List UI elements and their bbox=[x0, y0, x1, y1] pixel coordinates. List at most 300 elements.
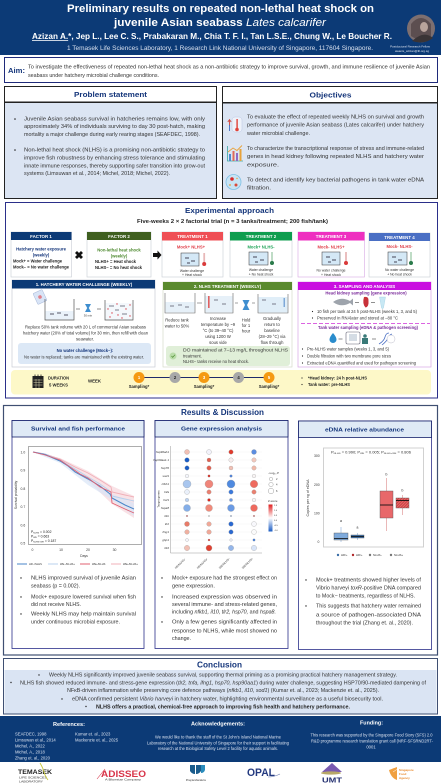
p values: NLHS bbox=[334, 453, 341, 455]
axis tick labels: 0.8 bbox=[20, 487, 25, 491]
axis tick labels: 20 bbox=[86, 548, 90, 552]
gene expression takeaways: Increased expression was observed in bbox=[172, 595, 277, 601]
p values bbox=[31, 530, 56, 544]
treatment 1 card: Water challenge bbox=[180, 269, 204, 273]
size and colour legend: -1.0 bbox=[274, 530, 279, 532]
title: juvenile Asian seabass Lates calcarifer bbox=[113, 17, 326, 29]
gene labels: il1b bbox=[164, 514, 169, 518]
step 2 description columns bbox=[165, 316, 286, 345]
treatment 1 card: TREATMENT 1 bbox=[177, 234, 208, 239]
step 2: NLHS treatment bbox=[163, 282, 292, 367]
factor 2 card bbox=[87, 232, 151, 277]
box: Mock- NLHS-: a bbox=[340, 519, 342, 523]
acknowledgements: Laboratory of the National University of Singapore for their support in facilitating bbox=[147, 740, 290, 746]
survival takeaways bbox=[20, 576, 136, 626]
logo: Adisseo bbox=[97, 769, 146, 782]
header banner bbox=[0, 0, 441, 55]
week timeline nodes: 5 bbox=[268, 375, 271, 380]
p values: = 0.005; P bbox=[364, 450, 385, 454]
heading: problem statement: Problem statement bbox=[74, 90, 147, 99]
step 3: sampling and analysis: 3. SAMPLING AND ANALYSIS bbox=[334, 284, 395, 289]
week timeline nodes: 3 bbox=[203, 375, 206, 380]
duration label: 5 WEEKS bbox=[49, 382, 68, 388]
conclusion points: NLHS fish showed reduced immune- and stress-gene expression ( tlr2, tnfa, ifng1, hsp70, hsp90aa1 ) during water challenge, suggesting HSP70/90-mediated dampening of bbox=[20, 680, 427, 686]
funding: Funding: bbox=[360, 720, 383, 726]
callout: dissolved oxygen: DO maintained at 7–13 mg/L throughout NLHS bbox=[183, 348, 288, 352]
gene labels: il10 bbox=[164, 546, 169, 550]
tank water bullets: Double filtration with two membrane pore sizes bbox=[307, 354, 391, 358]
survival legend bbox=[17, 562, 138, 566]
heading: survival: Survival and fish performance bbox=[31, 427, 126, 433]
treatment 4 card bbox=[369, 233, 430, 277]
icon: hourglass hold bbox=[235, 300, 255, 310]
logo: Adisseo: ADISSEO bbox=[101, 769, 146, 779]
step 2: NLHS treatment: 2. NLHS TREATMENT (WEEKLY) bbox=[194, 284, 262, 289]
panel: conclusion bbox=[4, 658, 438, 714]
y axis labels: 200 bbox=[314, 483, 320, 487]
problem statement text: approximately 34% of individuals surviving to day 30 post-hatch, making bbox=[24, 124, 205, 130]
panel: eDNA relative abundance bbox=[298, 421, 432, 650]
problem statement text: Juvenile Asian seabass survival in hatcheries remains low, with only bbox=[24, 117, 205, 123]
head kidney sampling heading: Head kidney sampling (gene expression) bbox=[325, 290, 407, 296]
sample labels: WE/NLHS+ bbox=[241, 556, 254, 570]
eDNA takeaways: to Mock− treatments, regardless of NLHS. bbox=[316, 594, 415, 600]
acknowledgements: We would like to thank the staff of the St John's Island National Marine bbox=[155, 734, 282, 740]
icon: hourglass bbox=[84, 304, 93, 318]
step 1: hatchery water challenge: 1. HATCHERY WATER CHALLENGE (WEEKLY) bbox=[36, 282, 133, 287]
size and colour legend: 6 bbox=[276, 489, 278, 493]
gene labels: hsp90ab1 bbox=[156, 450, 169, 454]
box plot legend: NLHS− bbox=[373, 553, 382, 557]
icon: arrow to treatments bbox=[153, 250, 162, 260]
survival takeaways: seabass (p = 0.002). bbox=[31, 584, 80, 590]
treatment 2 card: TREATMENT 2 bbox=[246, 234, 277, 239]
step 2 description columns: flow through bbox=[261, 340, 284, 345]
survival chart bbox=[14, 446, 142, 558]
week timeline nodes: 2 bbox=[174, 375, 177, 380]
axis tick labels: 0.9 bbox=[20, 468, 25, 472]
heading: experimental approach: Experimental approach bbox=[185, 206, 274, 215]
eDNA takeaways: throughout the trial (Zhang et. al., 2020). bbox=[316, 621, 413, 627]
curve: Mock- NLHS- bbox=[33, 452, 134, 509]
objective text 2: genes in head kidney following repeated NLHS and hatchery water bbox=[247, 154, 424, 160]
size and colour legend: 0.0 bbox=[274, 520, 278, 522]
step 2 description columns: sous vide bbox=[209, 340, 228, 345]
presenter contact bbox=[390, 45, 431, 53]
week label: WEEK bbox=[88, 378, 101, 384]
step 2 description columns: °C (to 39–40 °C) bbox=[203, 328, 234, 333]
gene labels: ifng1 bbox=[162, 530, 169, 534]
axis tick labels: 0.6 bbox=[20, 524, 25, 528]
eDNA takeaways bbox=[305, 578, 422, 627]
gene labels: sod1 bbox=[162, 474, 169, 478]
gene labels bbox=[153, 450, 169, 550]
affiliation: 1 Temasek Life Sciences Laboratory, 1 Research Link National University of Singapore, 117604 Singapore. bbox=[67, 46, 373, 52]
panel: survival and fish performance bbox=[12, 420, 144, 648]
tank water bullets: Extracted eDNA quantified and used for pathogen screening bbox=[307, 360, 417, 366]
p values: = 0.002 bbox=[39, 530, 52, 534]
panel: gene expression analysis bbox=[153, 420, 288, 648]
treatment 1 card: Mock+ NLHS+ bbox=[177, 244, 206, 250]
objective text 3: To detect and identify key bacterial pathogens in tank water eDNA bbox=[247, 178, 425, 184]
conclusion points: NFκB-driven inflammation while preserving core defence pathways ( nfkb1, il10, sod1) (Kumar et. al., 2023; Mackenzie et. al., 2025). bbox=[67, 688, 379, 694]
logo: Singapore Food Agency: Food bbox=[399, 772, 406, 776]
p values: P bbox=[31, 530, 33, 534]
problem statement text bbox=[14, 117, 206, 177]
logo: Singapore Food Agency: Singapore bbox=[399, 768, 414, 772]
icon: multiply sign: ✖ bbox=[74, 250, 84, 262]
box plot legend: NLHS+ bbox=[394, 553, 403, 557]
arrow bbox=[97, 308, 101, 310]
axis tick labels: 1.0 bbox=[20, 450, 25, 454]
axis tick labels bbox=[14, 450, 116, 558]
sample labels bbox=[174, 556, 254, 570]
objective text 2 bbox=[247, 146, 424, 169]
treatment 3 card bbox=[298, 232, 364, 277]
author photo bbox=[407, 14, 435, 42]
panel: objectives bbox=[222, 86, 438, 198]
icon: water, filter, operator and DNA bbox=[330, 332, 395, 345]
week timeline nodes: Sampling* bbox=[194, 384, 215, 389]
factor 1 card: FACTOR 1 bbox=[30, 234, 52, 239]
size and colour legend: Z-score bbox=[268, 499, 278, 503]
arrow bbox=[76, 308, 80, 310]
survival legend: WE+/NLHS+ bbox=[123, 562, 138, 566]
gene labels: hspa8 bbox=[161, 506, 169, 510]
funding: 0001 bbox=[366, 744, 376, 750]
logo: Temasek: LABORATORY bbox=[19, 780, 43, 784]
survival takeaways: Mock+ exposure lowered survival when fish bbox=[31, 595, 136, 601]
treatment 4 card: Mock- NLHS- bbox=[386, 244, 413, 249]
treatment 1 card: + Heat shock bbox=[182, 273, 202, 277]
factor 2 card: FACTOR 2 bbox=[108, 234, 130, 239]
icon: petri dish with bacteria bbox=[226, 174, 241, 190]
icon: heated tank bbox=[197, 293, 233, 313]
icon: recovery tank bbox=[258, 294, 288, 313]
curve: Mock+ NLHS+ bbox=[33, 452, 134, 501]
survival takeaways: under continuous microbial exposure. bbox=[31, 620, 120, 626]
sampling notes: *Head kidney: 24 h post-NLHS bbox=[308, 376, 367, 380]
eDNA takeaways: a source of pathogen-associated DNA bbox=[316, 613, 422, 619]
dots bbox=[183, 450, 258, 551]
acknowledgements: research at the Biological Safety Level 2 facility for aquatic animals. bbox=[158, 746, 278, 751]
week timeline nodes: Sampling* bbox=[259, 384, 280, 389]
p values: WE bbox=[33, 537, 37, 539]
box plot legend: HR/+ bbox=[356, 553, 363, 557]
eDNA takeaways: This suggests that hatchery water remained bbox=[316, 604, 421, 610]
timeline bar bbox=[11, 370, 431, 394]
y axis labels: 0 bbox=[318, 540, 320, 544]
week timeline nodes: 4 bbox=[237, 375, 240, 380]
sample labels: HR/NLHS− bbox=[174, 557, 187, 570]
sample labels: HR/NLHS+ bbox=[196, 557, 209, 570]
step 1: hatchery water challenge bbox=[12, 280, 155, 367]
survival legend: WE−/NLHS+ bbox=[60, 562, 75, 566]
gene labels: hsp90aa1.1 bbox=[153, 458, 169, 462]
step 2 description columns: for 1 bbox=[242, 323, 251, 328]
icon: reduced water tank bbox=[165, 293, 195, 313]
size and colour legend: −Log₁₀ P bbox=[268, 471, 279, 475]
objective text 3: filtration. bbox=[247, 186, 271, 192]
head kidney bullets bbox=[312, 309, 418, 320]
icon: pitcher pouring water bbox=[33, 289, 47, 305]
y axis labels: 300 bbox=[314, 454, 320, 458]
size and colour legend: 1.0 bbox=[274, 510, 278, 512]
tank water sampling heading: Tank water sampling (eDNA & pathogen screening) bbox=[318, 325, 419, 330]
step 1 description: seawater. bbox=[76, 336, 94, 342]
presenter contact: Postdoctoral Research Fellow bbox=[390, 45, 431, 49]
survival takeaways: NLHS improved survival of juvenile Asian bbox=[31, 576, 136, 582]
references: Kumar et. al., 2023 bbox=[75, 732, 111, 736]
callout: dissolved oxygen: treatment. bbox=[183, 354, 202, 358]
factor 2 card: Non-lethal heat shock bbox=[97, 248, 141, 252]
p values: = 0.990; P bbox=[341, 450, 361, 454]
treatment 3 card: + Heat shock bbox=[321, 273, 341, 277]
gene labels: hsf1 bbox=[163, 498, 169, 502]
treatment 3 card: TREATMENT 3 bbox=[316, 234, 347, 239]
y axis labels bbox=[306, 454, 320, 544]
gene labels: hsp70 bbox=[161, 466, 169, 470]
treatment 4 card: TREATMENT 4 bbox=[384, 235, 415, 240]
p values: P bbox=[331, 450, 333, 454]
axis tick labels: 0 bbox=[32, 548, 34, 552]
p values: NLHS×WE bbox=[33, 540, 44, 544]
factor 1 card: Mock+ = Water challenge bbox=[13, 258, 63, 264]
logo: Adisseo: A Bluestar Company bbox=[105, 778, 142, 782]
icon: calendar bbox=[32, 374, 44, 388]
box plot legend: HR/+ bbox=[341, 553, 348, 557]
logo: Temasek: LIFE SCIENCES bbox=[19, 776, 47, 780]
treatment 2 card: + No heat shock bbox=[249, 272, 274, 276]
curve: Mock+ NLHS- bbox=[33, 452, 134, 513]
acknowledgements bbox=[147, 722, 290, 751]
title: Preliminary results on repeated non-lethal heat shock on bbox=[67, 3, 374, 15]
gene expression takeaways: several immune- and stress-related genes, bbox=[172, 602, 277, 608]
problem statement text: improve fish robustness by enhancing stress tolerance and stimulating bbox=[24, 156, 205, 162]
survival legend: WE+/NLHS bbox=[92, 562, 106, 566]
references: References: bbox=[53, 722, 85, 728]
step 2 description columns: hour bbox=[242, 328, 251, 334]
p values: P bbox=[31, 539, 33, 543]
treatment 2 card bbox=[230, 232, 292, 277]
objective text 1: performance of juvenile Asian seabass (Lates calcarifer) under hatchery bbox=[247, 123, 424, 129]
factor 1 card: (weekly) bbox=[33, 252, 50, 258]
heading: conclusion: Conclusion bbox=[197, 660, 242, 670]
axis tick labels: 30 bbox=[113, 548, 116, 552]
step 2 description columns: return to bbox=[264, 322, 280, 327]
gene expression takeaways: Mock+ exposure had the strongest effect on bbox=[172, 576, 277, 582]
curve: Mock- NLHS+ bbox=[33, 452, 134, 497]
aim box bbox=[4, 58, 438, 82]
objective text 2: exposure. bbox=[247, 163, 279, 169]
funding bbox=[310, 720, 434, 750]
tank water bullets: Pre-NLHS water samples (weeks 1, 3, and 5) bbox=[307, 346, 390, 352]
conclusion points bbox=[10, 673, 427, 710]
gene expression takeaways: change. bbox=[172, 636, 191, 642]
gene expression takeaways: response to NLHS, while most showed no bbox=[172, 629, 277, 635]
logo: Singapore Food Agency: Agency bbox=[399, 776, 410, 780]
gene expression takeaways bbox=[161, 576, 277, 642]
p values: = 0.187 bbox=[44, 539, 56, 543]
p values: WE bbox=[360, 453, 365, 455]
axis tick labels: Survival probability bbox=[14, 480, 18, 509]
aim box: Aim: bbox=[8, 68, 25, 75]
sample labels: WE/NLHS− bbox=[218, 556, 231, 570]
step 1 description: Replace 50% tank volume with 20 L of commercial Asian seabass bbox=[25, 324, 146, 330]
factor 1 card: Mock− = No water challenge bbox=[13, 264, 70, 270]
icon: rising bar chart bbox=[228, 146, 243, 161]
axis tick labels: 10 bbox=[59, 548, 63, 552]
treatment 2 card: Water challenge bbox=[249, 268, 273, 272]
sampling notes: Tank water: pre-NLHS bbox=[308, 382, 350, 387]
box: Mock+ NLHS+: b bbox=[402, 488, 404, 492]
survival takeaways: did not receive NLHS. bbox=[31, 602, 81, 608]
gene labels: Target genes bbox=[156, 490, 160, 508]
objective text 2: To characterize the transcriptional response of stress and immune-related bbox=[247, 146, 424, 152]
logo: OPAL: OPAL bbox=[247, 767, 275, 779]
footer band bbox=[0, 716, 441, 762]
gene expression takeaways: including nfkb1, il10, tlr2, hsp70, and hspa8. bbox=[172, 610, 276, 616]
size and colour legend bbox=[268, 471, 279, 532]
gene labels: nfkb1 bbox=[162, 482, 169, 486]
logos row bbox=[18, 763, 414, 784]
size and colour legend: 0.5 bbox=[274, 515, 278, 517]
callout: no water challenge bbox=[18, 343, 151, 364]
objective text 3 bbox=[247, 178, 425, 192]
authors: Azizan A.*, Jep L., Lee C. S., Prabakaran M., Chia T. F. I., Tan L.S.E., Chung W., Le Boucher R. bbox=[32, 32, 392, 41]
references: SEAFDEC, 1998 bbox=[15, 732, 47, 736]
box: Mock+ NLHS-: b bbox=[386, 472, 388, 476]
gene labels: tnfa bbox=[164, 490, 169, 494]
subtitle: trial design: Five-weeks 2 × 2 factorial trial (n = 3 tanks/treatment; 200 fish/tank) bbox=[137, 219, 328, 225]
gene labels: tlr2 bbox=[165, 522, 169, 526]
funding: R&D programme research translation grant call (NRF-SFSRND2RT- bbox=[311, 738, 434, 744]
icon: hourglass: 30 min bbox=[84, 314, 93, 318]
eDNA takeaways: Mock+ treatments showed higher levels of bbox=[316, 578, 422, 584]
objective text 1 bbox=[247, 115, 424, 137]
step 3: sampling and analysis bbox=[298, 282, 431, 367]
gene expression takeaways: Only a few genes significantly affected in bbox=[172, 620, 277, 626]
step 2 description columns: Gradually bbox=[263, 316, 282, 321]
axis tick labels: 0.7 bbox=[20, 505, 25, 509]
panel: problem statement bbox=[4, 86, 216, 198]
p values: NLHS×WE bbox=[384, 452, 397, 455]
logo: UMT bbox=[321, 763, 343, 784]
eDNA takeaways: Vibrio harveyi toxR-positive DNA compared bbox=[316, 586, 421, 592]
gene labels: gbp1 bbox=[162, 538, 169, 542]
references: Michel, A., 2022 bbox=[15, 744, 45, 748]
aim box: seabass under hatchery microbial challenge conditions. bbox=[28, 73, 159, 79]
axis tick labels: Days bbox=[80, 554, 88, 558]
heading: results and discussion: Results & Discussion bbox=[181, 408, 264, 417]
head kidney bullets: 10 fish per tank at 24 h post-NLHS (weeks 1, 3, and 5) bbox=[317, 309, 418, 314]
logo: Temasek: TEMASEK bbox=[18, 769, 52, 776]
logo: shield: Peptobiotics bbox=[186, 778, 207, 782]
factor 2 card: (weekly) bbox=[111, 254, 128, 258]
references: Zhang et. al., 2020 bbox=[15, 756, 51, 760]
objective text 1: water microbial challenge. bbox=[247, 131, 310, 137]
y axis labels: Copies per ng of eDNA bbox=[306, 479, 310, 516]
box plot bbox=[306, 448, 424, 547]
problem statement text: systems (Limsuwan et al., 2014; Michel, 2018; Michel, 2022). bbox=[24, 171, 170, 177]
factor 1 card: Hatchery water exposure bbox=[16, 246, 67, 252]
acknowledgements: Acknowledgements: bbox=[191, 722, 245, 728]
step 2 description columns: using 1200 W bbox=[205, 334, 231, 339]
heading: objectives: Objectives bbox=[310, 90, 352, 99]
logo: shield bbox=[186, 765, 207, 782]
treatment 4 card: + No heat shock bbox=[387, 272, 412, 276]
step 2 description columns: (28–29 °C) via bbox=[259, 334, 286, 339]
survival legend: HR−/NLHS bbox=[29, 562, 42, 566]
treatment 3 card: Mock- NLHS+ bbox=[317, 244, 345, 250]
treatment 4 card: No water challenge bbox=[385, 268, 414, 272]
size and colour legend: 2 bbox=[276, 477, 278, 481]
references: Limsuwan et al., 2014 bbox=[15, 738, 56, 742]
head kidney bullets: Preserved in RNAlater and stored at −80 °C bbox=[317, 316, 398, 320]
survival takeaways: Weekly NLHS may help maintain survival bbox=[31, 612, 136, 618]
dot plot bbox=[153, 446, 279, 570]
problem statement text: Non-lethal heat shock (NLHS) is a promising non-antibiotic strategy to bbox=[24, 148, 205, 154]
factor 1 card bbox=[11, 232, 72, 277]
step 1 description: hatchery water (20% of total volume) for 30 min, then refill with clean bbox=[23, 330, 149, 336]
size and colour legend: -0.5 bbox=[274, 525, 279, 527]
conclusion points: eDNA confirmed persistent Vibrio harveyi in hatchery water, highlighting environmental surveillance as a useful biosecurity tool. bbox=[72, 697, 383, 703]
icon: clean water tank bbox=[45, 299, 74, 320]
logo: Singapore Food Agency bbox=[389, 767, 414, 780]
box plot legend bbox=[337, 553, 403, 557]
step 2 description columns: baseline bbox=[264, 328, 280, 333]
axis tick labels: 0.5 bbox=[20, 542, 25, 546]
duration label bbox=[48, 376, 69, 388]
callout: dissolved oxygen: NLHS− tanks receive no heat shock. bbox=[183, 359, 249, 364]
p values: = 0.806 bbox=[396, 450, 411, 454]
problem statement text: mortality a major challenge during early rearing stages (SEAFDEC, 1998). bbox=[24, 132, 200, 138]
week timeline nodes: 1 bbox=[138, 375, 141, 380]
objective text 1: To evaluate the effect of repeated weekly NLHS on survival and growth bbox=[247, 115, 424, 121]
title bbox=[67, 3, 374, 29]
heading: gene expression: Gene expression analysis bbox=[181, 427, 262, 433]
problem statement text: innate immune responses, thereby supporting safer transition into grow-out bbox=[24, 163, 206, 169]
treatment 3 card: No water challenge bbox=[316, 268, 346, 272]
logo: Temasek bbox=[18, 763, 52, 784]
tank water bullets bbox=[302, 346, 417, 366]
factor 2 card: NLHS+ = Heat shock bbox=[95, 259, 137, 264]
step 2 description columns: Hold bbox=[242, 318, 251, 322]
references: Michel, A., 2018 bbox=[15, 750, 45, 754]
conclusion points: Weekly NLHS significantly improved juvenile seabass survival, supporting thermal priming as a promising practical hatchery management strategy. bbox=[49, 673, 397, 679]
factor 2 card: NLHS− = No heat shock bbox=[95, 265, 143, 270]
week timeline nodes bbox=[129, 372, 280, 389]
duration label: DURATION bbox=[48, 376, 69, 380]
references: Mackenzie et. al., 2025 bbox=[75, 738, 119, 742]
aim box: To investigate the effectiveness of repeated non-lethal heat shock as a non-antibiotic strategy to improve survival, growth, and immune resilience of juvenile Asian bbox=[28, 64, 430, 70]
sampling notes bbox=[301, 376, 367, 387]
step 2 description columns: Reduce tank bbox=[165, 318, 190, 322]
presenter contact: awanis_azizan@tll.org.sg bbox=[395, 49, 429, 53]
treatment 2 card: Mock+ NLHS- bbox=[247, 244, 275, 250]
p values: NLHS bbox=[33, 532, 40, 534]
conclusion points: NLHS offers a practical, chemical-free approach to improving fish health and hatchery performance. bbox=[96, 704, 351, 710]
callout: no water challenge: No water challenge (Mock−): bbox=[57, 348, 113, 353]
box: Mock- NLHS+: a bbox=[357, 526, 359, 530]
gene expression takeaways: gene expression. bbox=[172, 584, 215, 590]
step 2 description columns: temperature by ~9 bbox=[201, 322, 236, 327]
panel: results and discussion bbox=[4, 406, 438, 655]
references bbox=[15, 722, 119, 760]
step 1 description bbox=[23, 324, 149, 342]
treatment 1 card bbox=[162, 232, 223, 277]
icon: microbial water tank bbox=[105, 300, 133, 320]
